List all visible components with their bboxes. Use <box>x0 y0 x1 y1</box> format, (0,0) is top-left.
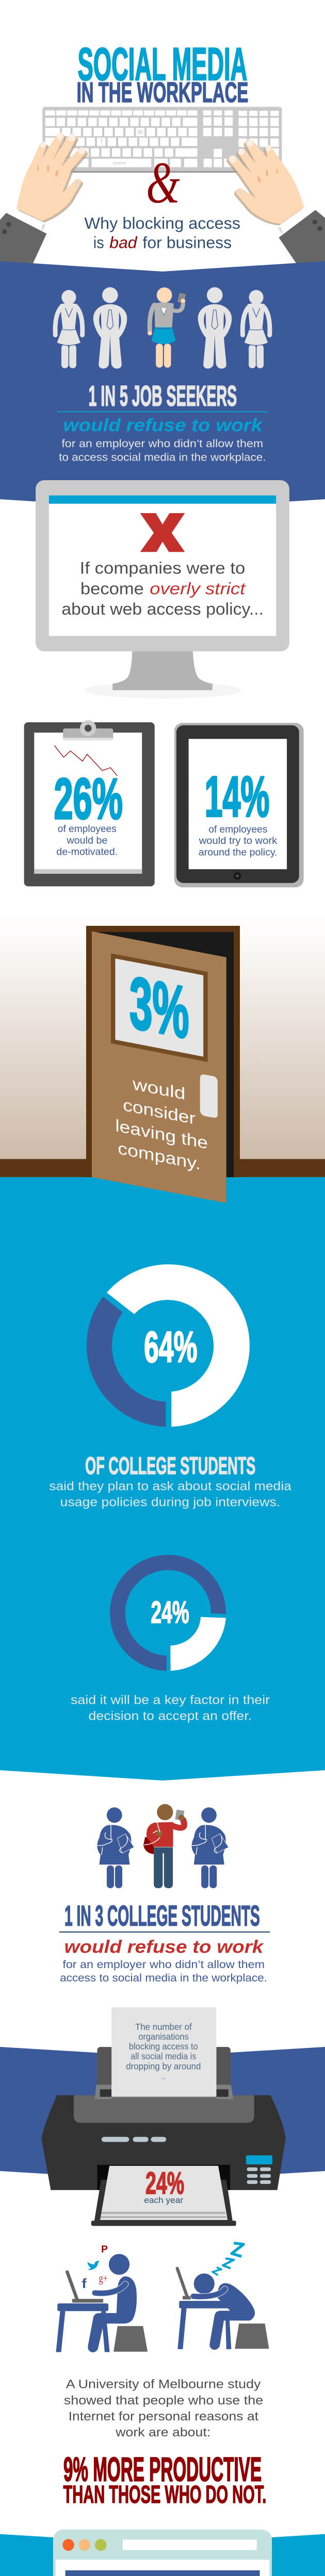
caption <box>56 824 118 857</box>
stat: 1 in 3 college students <box>59 1901 270 1984</box>
stat text: of college students <box>49 1452 291 1509</box>
body text: for an employer who didn’t allow them <box>61 437 263 450</box>
subheading: would refuse to work <box>63 415 263 435</box>
icon: facebook: f <box>82 2276 87 2291</box>
icon: woman one <box>55 290 83 368</box>
icon: door <box>86 926 240 1203</box>
melbourne study text: showed that people who use the <box>64 2393 263 2408</box>
paper sheet: ... <box>161 2071 166 2081</box>
icon: twitter <box>88 2261 100 2270</box>
subheading: would refuse to work <box>64 1936 264 1957</box>
donut chart: 24%: 24% <box>151 1595 189 1630</box>
subtitle <box>85 214 240 251</box>
subtitle: for business <box>142 233 232 251</box>
number: 3% <box>129 961 189 1054</box>
paper sheet: dropping by around <box>126 2061 201 2071</box>
printer buttons <box>102 2137 166 2142</box>
panel: printer band <box>0 2047 325 2181</box>
icon: left hand and sleeve <box>0 133 88 265</box>
line chart falling <box>54 745 117 776</box>
caption: of employees <box>208 824 267 835</box>
icon: man two <box>198 287 232 369</box>
subtitle: Why blocking access <box>85 214 240 232</box>
number: 24% <box>145 2166 184 2201</box>
number: 26% <box>54 767 123 832</box>
caption <box>199 824 278 858</box>
caption: leaving the <box>115 1116 208 1153</box>
student pictograms <box>96 1804 229 1888</box>
body text line two: access to social media in the workplace. <box>60 1972 267 1984</box>
tablet: 14% <box>174 723 304 887</box>
donut chart: 64%: 64% <box>144 1324 198 1371</box>
title <box>77 39 248 108</box>
stat text: of college students: said they plan to ask about social media <box>49 1479 291 1493</box>
subtitle: is <box>93 233 104 251</box>
stat: 1 in 5 job seekers <box>57 381 268 464</box>
caption: would <box>132 1075 186 1104</box>
caption: around the policy. <box>199 847 278 858</box>
job seekers pictograms <box>55 287 270 369</box>
stat text: key factor: decision to accept an offer. <box>89 1709 252 1723</box>
printer output tray <box>91 2165 236 2226</box>
caption: company. <box>118 1139 201 1174</box>
skirting board <box>0 1159 325 1178</box>
monitor text: become <box>80 580 144 598</box>
icon: student right <box>191 1807 229 1888</box>
browser window <box>53 2530 272 2576</box>
keyboard: in <box>138 128 142 135</box>
paper sheet <box>111 2007 216 2097</box>
icon: student centre with phone <box>143 1804 185 1888</box>
monitor text: If companies were to <box>80 559 245 578</box>
number: 14% <box>205 765 269 829</box>
icon: highlighted woman with phone <box>148 287 186 368</box>
stat text: key factor <box>71 1693 270 1723</box>
icon: monitor <box>36 480 289 699</box>
icon: man one <box>93 287 127 369</box>
donut chart: 64% <box>87 1264 250 1427</box>
body text: for an employer who didn’t allow them <box>62 1958 265 1971</box>
panel: job seekers band <box>0 261 325 510</box>
paper sheet: organisations <box>138 2031 189 2042</box>
melbourne study text: Internet for personal reasons at <box>69 2409 258 2424</box>
body text line two: to access social media in the workplace. <box>59 451 266 464</box>
melbourne study text: work are about: <box>115 2425 210 2439</box>
caption: de-motivated. <box>56 846 118 857</box>
caption: consider <box>123 1096 196 1128</box>
clipboard: 26% <box>24 720 155 886</box>
paper sheet: all social media is <box>131 2052 197 2061</box>
donut chart: 24% <box>110 1555 226 1671</box>
keyboard <box>42 107 282 173</box>
icon: google plus: g+ <box>99 2272 108 2285</box>
caption: each year <box>144 2196 184 2205</box>
keyboard: f <box>100 138 103 145</box>
monitor text: about web access policy... <box>61 600 264 619</box>
stat text: key factor: said it will be a key factor in their <box>71 1693 270 1707</box>
monitor text <box>61 559 264 619</box>
caption: would be <box>66 835 108 846</box>
caption: would try to work <box>199 836 277 846</box>
icon: student left <box>96 1807 134 1888</box>
icon: sleeping z marks <box>213 2243 243 2275</box>
icon: woman two <box>242 290 270 368</box>
keyboard: myspace <box>113 161 126 165</box>
icon: right hand and sleeve <box>226 140 325 264</box>
subtitle: bad <box>109 233 138 251</box>
panel: browser band <box>0 2534 325 2576</box>
stat text: of college students: usage policies during job interviews. <box>60 1495 280 1509</box>
melbourne study text: A University of Melbourne study <box>66 2377 261 2391</box>
paper sheet: The number of <box>135 2022 192 2032</box>
icon: worker browsing social media <box>56 2244 148 2352</box>
icon: pinterest: P <box>101 2244 108 2255</box>
headline: 9% more productive <box>63 2451 266 2509</box>
icon: printer <box>41 2007 286 2190</box>
icon: worker sleeping <box>177 2243 269 2350</box>
monitor text: overly strict <box>150 580 246 598</box>
ampersand: & <box>146 150 180 215</box>
caption <box>115 1075 208 1174</box>
paper sheet: blocking access to <box>129 2041 198 2052</box>
caption: of employees <box>58 824 117 835</box>
wall background <box>0 902 325 1159</box>
icon: red x <box>140 513 185 552</box>
panel: college students band <box>0 1177 325 1781</box>
melbourne study text <box>64 2377 263 2439</box>
